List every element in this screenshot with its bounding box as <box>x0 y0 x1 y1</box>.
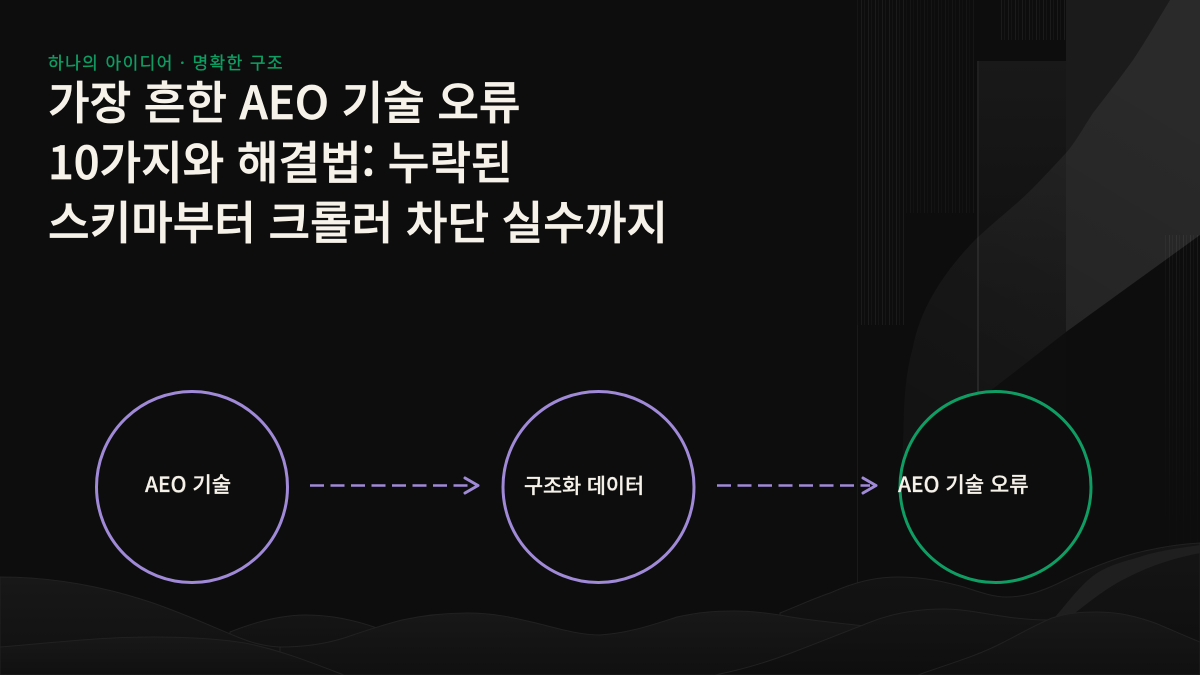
title: 스키마부터 크롤러 차단 실수까지 <box>48 188 668 253</box>
eyebrow: 하나의 아이디어 · 명확한 구조 <box>48 49 284 74</box>
arrow 2 <box>717 478 876 493</box>
label: 구조화 데이터: 구조화 데이터 <box>524 469 644 499</box>
title <box>48 68 668 253</box>
title: 가장 흔한 AEO 기술 오류 <box>48 68 520 133</box>
label: AEO 기술 오류: AEO 기술 오류 <box>898 469 1029 499</box>
circle: 구조화 데이터 <box>503 392 694 582</box>
flow diagram lines <box>96 392 1091 582</box>
label: AEO 기술: AEO 기술 <box>145 469 231 499</box>
wave landscape <box>0 543 1200 675</box>
title: 10가지와 해결법: 누락된 <box>48 128 512 193</box>
circle: AEO 기술 오류 <box>900 392 1091 582</box>
striped architectural panels <box>857 0 1200 585</box>
circle: AEO 기술 <box>96 392 288 582</box>
arrow 1 <box>310 478 478 493</box>
ribbon curve <box>902 0 1200 480</box>
